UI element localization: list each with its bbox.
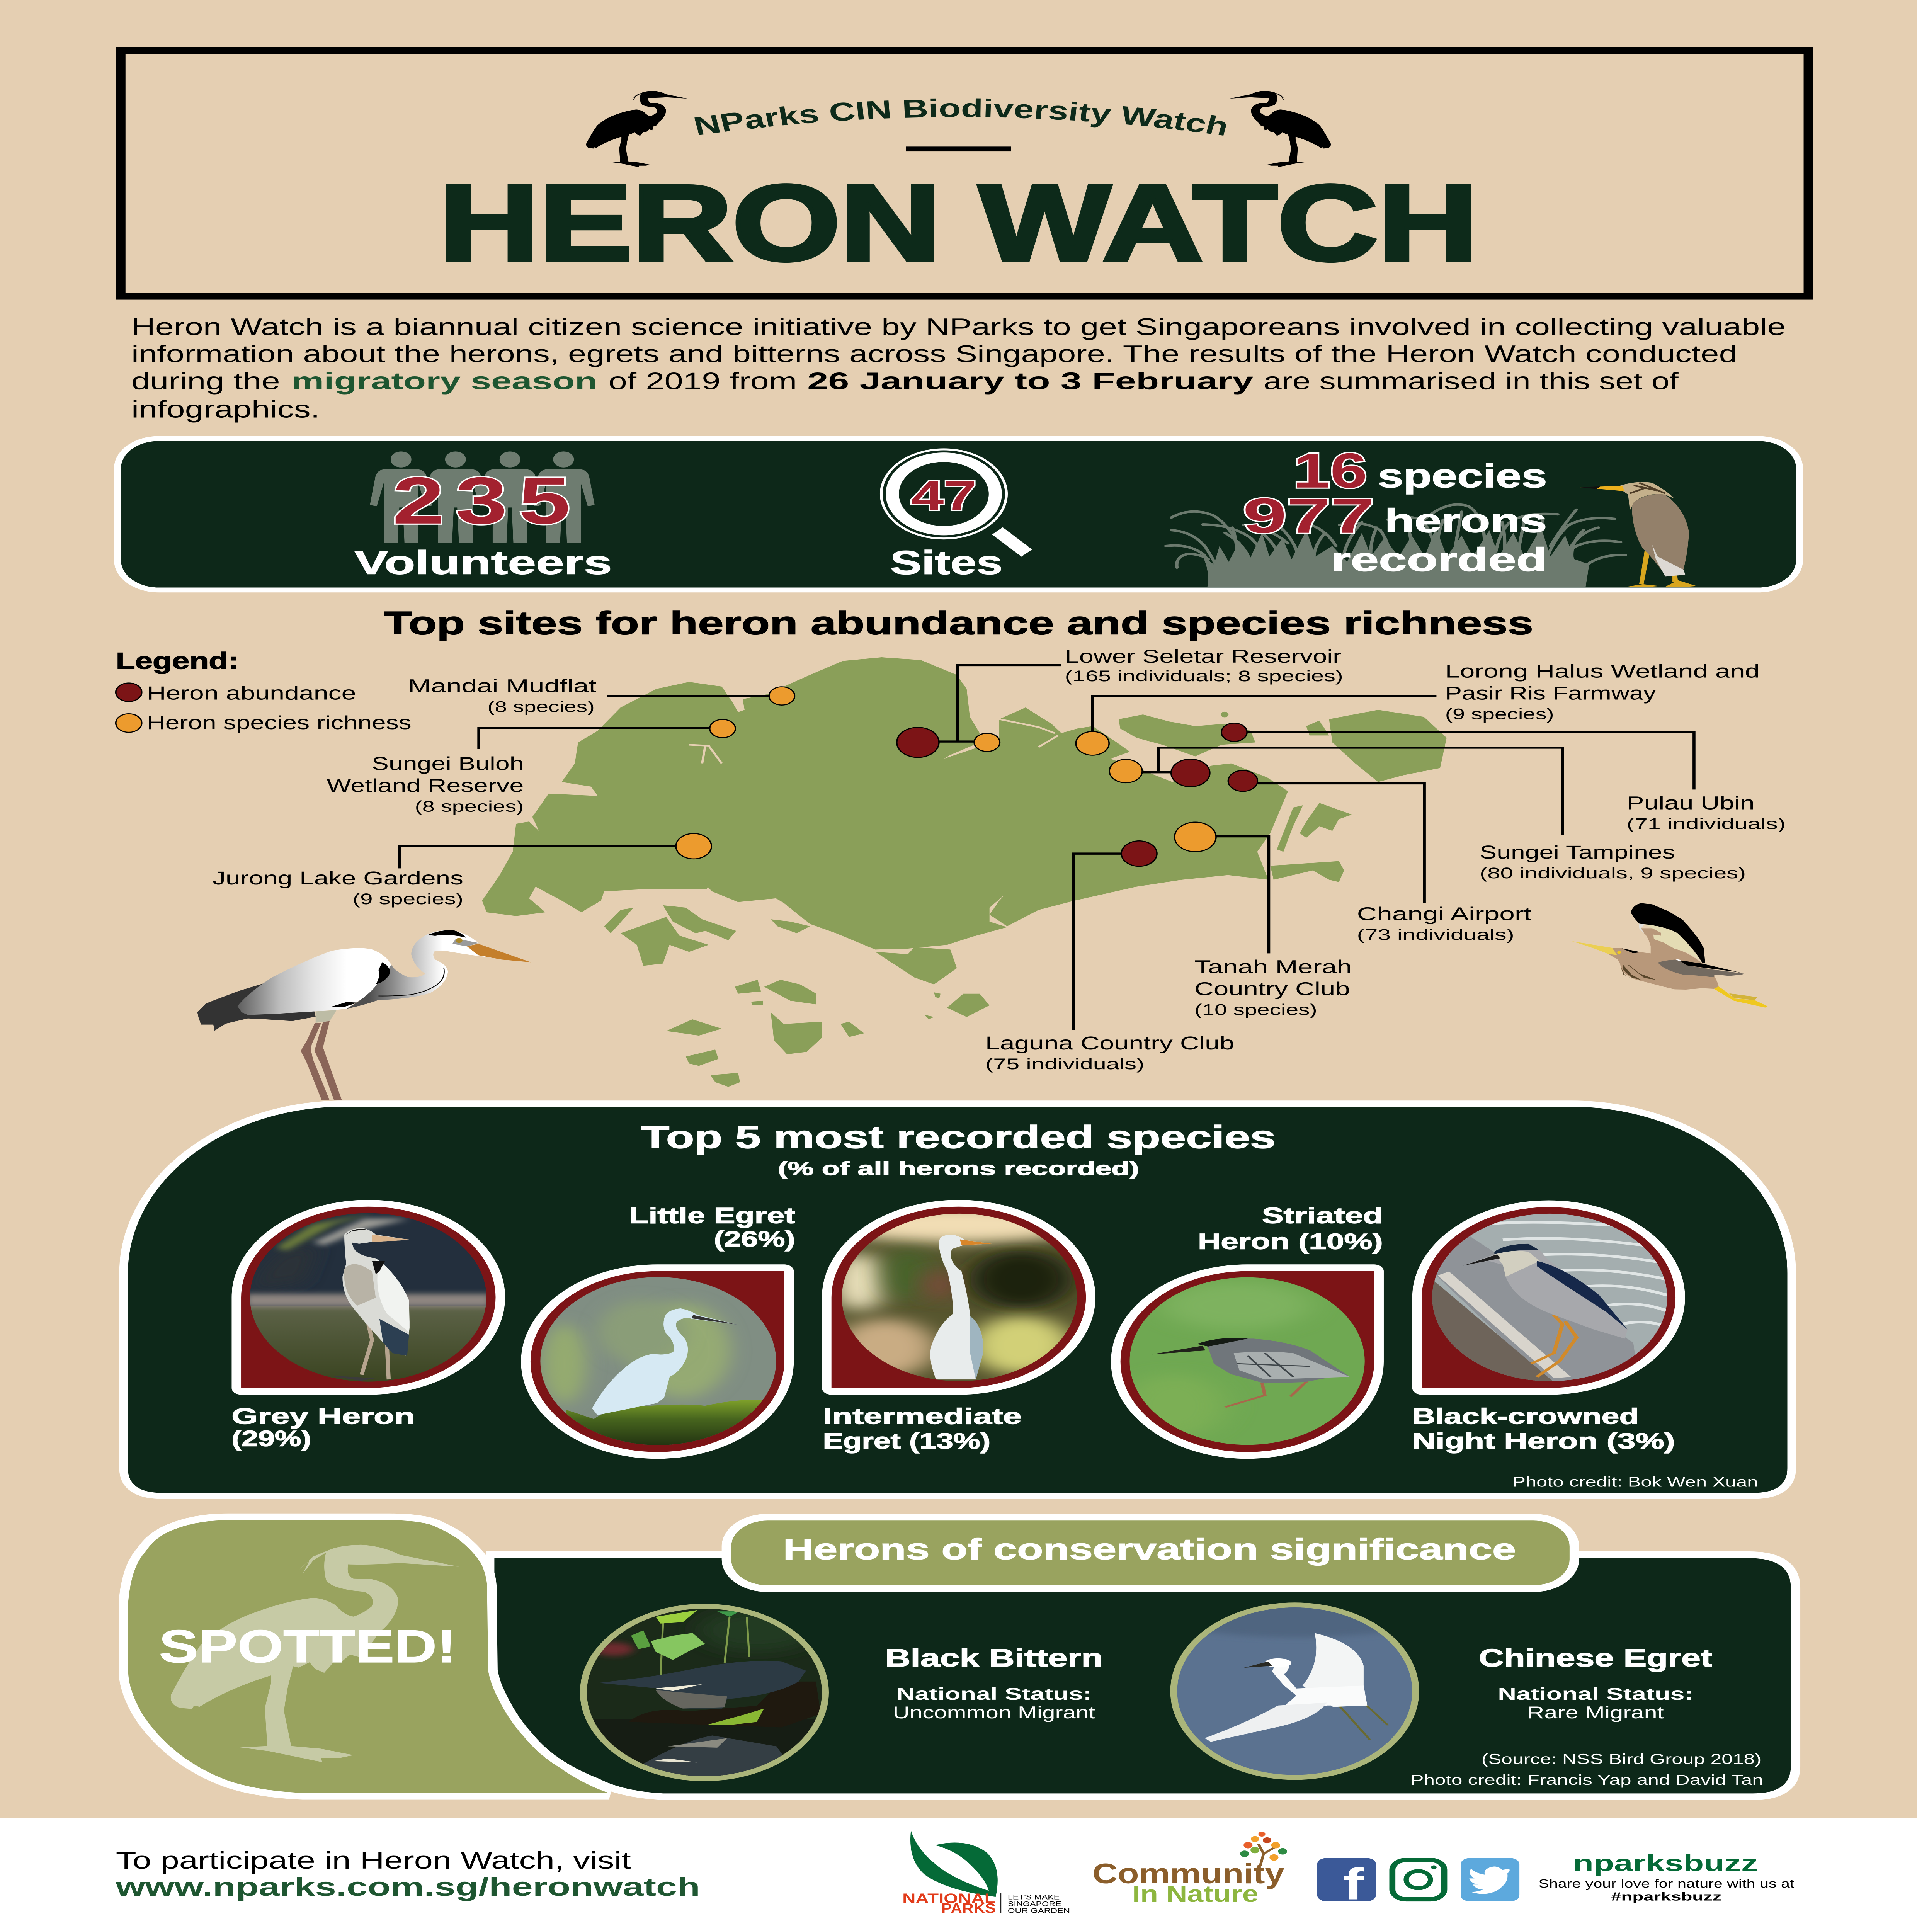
illustration: grass (1166, 505, 1626, 587)
icon: left heron silhouette (586, 91, 687, 167)
intro paragraph: infographics. (131, 396, 320, 423)
stat: 977 herons recorded: 977 (1243, 488, 1374, 543)
stat: 977 herons recorded: herons (1385, 502, 1547, 539)
label: Sungei Tampines: Sungei Tampines (1480, 842, 1675, 863)
call to action: www.nparks.com.sg/heronwatch (116, 1872, 700, 1901)
label: Little Egret: (26%) (714, 1226, 795, 1251)
main title: HERON WATCH (439, 163, 1478, 283)
spotted label: SPOTTED! (159, 1621, 456, 1672)
social handle: Share your love for nature with us at (1538, 1877, 1794, 1890)
intro paragraph: during the (131, 368, 280, 395)
text: Chinese Egret: Rare Migrant (1527, 1703, 1664, 1722)
jurong islands (604, 905, 810, 966)
intro paragraph: 26 January to 3 February (807, 368, 1253, 395)
illustration: grey heron (197, 930, 531, 1100)
photo: Black-crowned Night Heron (1422, 1207, 1675, 1388)
logo: Community In Nature: Community (1092, 1858, 1284, 1889)
label: Pulau Ubin: (71 individuals) (1626, 815, 1786, 832)
call to action: To participate in Heron Watch, visit (116, 1847, 631, 1874)
label: Tanah Merah: Country Club (1194, 979, 1350, 999)
label: Sungei Buloh (327, 753, 524, 815)
label: Striated Heron: Heron (10%) (1198, 1229, 1383, 1254)
label: Jurong Lake Gardens (213, 868, 463, 908)
stat: sites: Sites (890, 544, 1003, 581)
pulau ubin (1119, 714, 1255, 757)
map labels (213, 646, 1786, 1073)
panel subheading: (% of all herons recorded) (778, 1158, 1139, 1179)
social handle: nparksbuzz (1573, 1851, 1758, 1876)
label: Sungei Buloh: (8 species) (415, 798, 524, 815)
label: Tanah Merah: Tanah Merah (1194, 957, 1352, 977)
panel heading: Top 5 most recorded species (641, 1119, 1276, 1155)
stat: 235 volunteers (354, 464, 612, 581)
social handle (1538, 1851, 1794, 1903)
stat: 235 volunteers: 235 (392, 464, 570, 538)
photo: Striated Heron (1121, 1271, 1374, 1452)
icon: four people (370, 451, 595, 543)
dark background (486, 1558, 1791, 1793)
southern islands (735, 980, 990, 1019)
label: Grey Heron: (29%) (231, 1426, 311, 1451)
label: Black-crowned Night Heron: Black-crowned (1412, 1404, 1639, 1429)
label: Intermediate Egret: Intermediate (823, 1404, 1022, 1429)
olive tab (128, 1520, 609, 1793)
pulau tekong (1329, 710, 1447, 782)
icon: magnifying glass: 47 (911, 472, 976, 519)
logo: National Parks: SINGAPORE (1008, 1900, 1061, 1908)
subtitle arched: NParks CIN Biodiversity Watch (691, 94, 1232, 141)
intro paragraph: information about the herons, egrets and bitterns across Singapore. The results of the Heron Watch conducted (131, 340, 1737, 367)
intro paragraph: are summarised in this set of (1264, 368, 1679, 395)
map markers (676, 687, 1257, 866)
icon: twitter (1461, 1858, 1519, 1901)
heading pill: Herons of conservation significance (783, 1533, 1516, 1566)
illustration: pond heron (1580, 482, 1696, 587)
label: Mandai Mudflat (408, 676, 596, 716)
text: Chinese Egret: National Status: (1498, 1684, 1693, 1704)
intro paragraph: of 2019 from (609, 368, 797, 395)
call to action (116, 1847, 700, 1901)
legend (116, 648, 412, 733)
panel: conservation significance (128, 1520, 1791, 1793)
icon: facebook (1317, 1858, 1376, 1909)
label: Lorong Halus (1445, 661, 1760, 723)
photo: Black Bittern (574, 1603, 831, 1784)
label: Lorong Halus: Lorong Halus Wetland and (1445, 661, 1760, 682)
label: Sungei Buloh: Wetland Reserve (327, 776, 524, 796)
stat: 235 volunteers: Volunteers (354, 544, 612, 581)
social handle: #nparksbuzz (1611, 1890, 1722, 1903)
intro paragraph: migratory season (291, 368, 597, 395)
label: Sungei Buloh: Sungei Buloh (372, 753, 524, 774)
label: Sungei Tampines (1480, 842, 1746, 882)
main island (482, 657, 1288, 949)
logo: Community In Nature (1092, 1832, 1287, 1907)
icon: right heron silhouette (1230, 91, 1331, 167)
icon: facebook: f (1343, 1859, 1364, 1909)
panel: top 5 species (128, 1107, 1787, 1493)
label: Laguna Country Club (985, 1033, 1234, 1073)
label: Intermediate Egret: Egret (13%) (823, 1429, 990, 1453)
label: Laguna Country Club: (75 individuals) (985, 1056, 1144, 1073)
logo: National Parks: PARKS (941, 1901, 996, 1916)
illustration: flying bittern (1572, 903, 1767, 1008)
label: Jurong Lake Gardens: Jurong Lake Gardens (213, 868, 463, 888)
photo: Little Egret (531, 1271, 784, 1452)
label: Pulau Ubin (1626, 793, 1786, 832)
stat: 16 species (1293, 443, 1547, 498)
logo: Community In Nature: In Nature (1132, 1881, 1259, 1907)
photo: Grey Heron (241, 1207, 496, 1388)
map leader lines (399, 665, 1694, 1030)
icon: instagram (1392, 1860, 1444, 1900)
label: Striated Heron: Striated (1262, 1203, 1383, 1228)
label: Tanah Merah (1194, 957, 1352, 1019)
rivers and inlets (689, 687, 1058, 764)
photo: Chinese Egret (1162, 1602, 1431, 1785)
label: Lower Seletar Reservoir: (165 individuals; 8 species) (1065, 668, 1343, 685)
text: Chinese Egret (1479, 1644, 1712, 1722)
label: Lorong Halus: Pasir Ris Farmway (1445, 683, 1656, 704)
text: Black Bittern: Black Bittern (885, 1644, 1103, 1672)
icon: magnifying glass (880, 448, 1027, 553)
label: Changi Airport: (73 individuals) (1357, 926, 1514, 943)
label: Intermediate Egret (823, 1404, 1022, 1453)
label: Mandai Mudflat: Mandai Mudflat (408, 676, 596, 696)
title frame (121, 51, 1808, 296)
label: Jurong Lake Gardens: (9 species) (353, 891, 463, 908)
label: Little Egret: Little Egret (629, 1203, 795, 1228)
label: Lorong Halus: (9 species) (1445, 706, 1554, 723)
footer (0, 1818, 1917, 1932)
legend: Legend: (116, 648, 238, 674)
label: Changi Airport: Changi Airport (1357, 904, 1531, 924)
text: Chinese Egret: Chinese Egret (1479, 1644, 1712, 1672)
legend item: abundance: Heron abundance (147, 682, 356, 704)
heading: top sites: Top sites for heron abundance and species richness (384, 605, 1533, 641)
label: Grey Heron: Grey Heron (231, 1404, 415, 1429)
label: Black-crowned Night Heron (1412, 1404, 1675, 1453)
text: Black Bittern: National Status: (896, 1684, 1092, 1704)
heading pill (731, 1520, 1570, 1585)
source note: (Source: NSS Bird Group 2018) (1482, 1752, 1761, 1767)
title panel (121, 51, 1808, 296)
text: Black Bittern (885, 1644, 1103, 1722)
logo: National Parks: LET'S MAKE (1008, 1893, 1060, 1901)
sentosa islands (875, 947, 957, 985)
stat: 16 species: 16 (1293, 443, 1367, 498)
icon: heron silhouette (171, 1545, 459, 1762)
stat: 977 herons recorded: recorded (1331, 541, 1547, 578)
label: Little Egret (629, 1203, 795, 1251)
logo: National Parks: OUR GARDEN (1008, 1906, 1070, 1915)
photo: Intermediate Egret (828, 1206, 1089, 1388)
label: Tanah Merah: (10 species) (1194, 1001, 1317, 1019)
label: Pulau Ubin: Pulau Ubin (1626, 793, 1755, 813)
intro paragraph (131, 313, 1786, 423)
logo: National Parks: NATIONAL (902, 1891, 996, 1906)
map of Singapore (482, 657, 1447, 1087)
label: Black-crowned Night Heron: Night Heron (3%) (1412, 1429, 1675, 1453)
text: Black Bittern: Uncommon Migrant (893, 1703, 1095, 1722)
changi east islets (1277, 803, 1352, 852)
logo: National Parks (902, 1830, 1070, 1916)
photo credit: Photo credit: Bok Wen Xuan (1512, 1475, 1758, 1490)
panel: headline stats (121, 441, 1796, 588)
label: Lower Seletar Reservoir (1065, 646, 1343, 685)
label: Grey Heron (231, 1404, 415, 1451)
label: Mandai Mudflat: (8 species) (487, 698, 595, 716)
label: Lower Seletar Reservoir: Lower Seletar Reservoir (1065, 646, 1341, 667)
intro paragraph: Heron Watch is a biannual citizen science initiative by NParks to get Singaporeans involved in collecting valuable (131, 313, 1786, 340)
legend item: species richness: Heron species richness (147, 712, 412, 733)
label: Changi Airport (1357, 904, 1531, 943)
label: Striated Heron (1198, 1203, 1383, 1254)
photo credit: Photo credit: Francis Yap and David Tan (1410, 1772, 1763, 1788)
stat: 16 species: species (1378, 457, 1547, 495)
stat: 977 herons recorded (1243, 488, 1547, 578)
label: Laguna Country Club: Laguna Country Club (985, 1033, 1234, 1054)
label: Sungei Tampines: (80 individuals, 9 species) (1480, 865, 1746, 882)
